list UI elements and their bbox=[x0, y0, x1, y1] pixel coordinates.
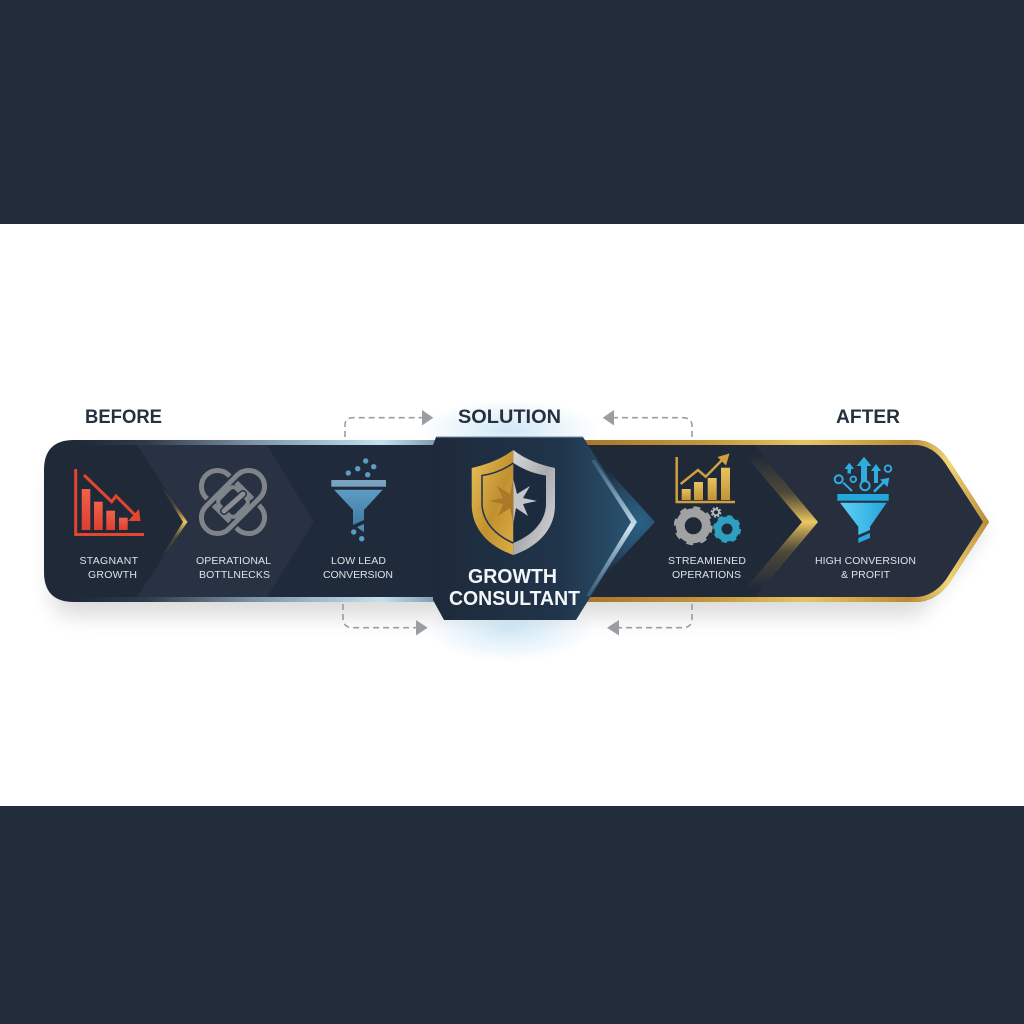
label: growth consultant bbox=[449, 566, 580, 610]
solution hexagon bbox=[433, 437, 637, 620]
before band top edge bbox=[74, 440, 436, 445]
panel: low lead conversion bbox=[267, 445, 440, 597]
label: low lead conversion: CONVERSION bbox=[323, 569, 393, 581]
panel: high conversion bbox=[755, 445, 983, 597]
icon: leaky funnel bbox=[331, 458, 386, 541]
label: growth consultant: CONSULTANT bbox=[449, 588, 580, 610]
panel: stagnant growth base bbox=[44, 440, 989, 602]
label: operational bottlenecks: OPERATIONAL bbox=[196, 555, 271, 567]
blue glow behind solution panel bbox=[420, 400, 600, 662]
process band bbox=[44, 440, 989, 602]
top navy band bbox=[0, 0, 1024, 224]
gold chevron divider one bbox=[158, 482, 188, 562]
panel: operational bottlenecks bbox=[137, 445, 314, 597]
label: streamlined operations: OPERATIONS bbox=[672, 569, 741, 581]
label: streamlined operations bbox=[668, 555, 746, 581]
label: high conversion and profit bbox=[815, 555, 916, 581]
label: stagnant growth bbox=[80, 555, 139, 581]
label: growth consultant: GROWTH bbox=[468, 566, 557, 588]
icon: high conversion funnel bbox=[835, 457, 891, 543]
band drop shadow bbox=[52, 456, 985, 616]
hexagon top highlight bbox=[436, 436, 583, 438]
arrow: top left dashed bbox=[345, 410, 433, 437]
label: low lead conversion: LOW LEAD bbox=[331, 555, 386, 567]
heading: solution: SOLUTION bbox=[458, 407, 561, 428]
label: stagnant growth: STAGNANT bbox=[80, 555, 139, 567]
label: low lead conversion bbox=[323, 555, 393, 581]
icon: tangled knot bbox=[195, 464, 271, 540]
bottom navy band bbox=[0, 806, 1024, 1024]
label: streamlined operations: STREAMIENED bbox=[668, 555, 746, 567]
gold chevron divider two bbox=[738, 447, 818, 597]
after band gold border bbox=[570, 442, 986, 600]
before band bottom edge bbox=[74, 597, 436, 602]
arrow: top right dashed bbox=[603, 410, 692, 437]
arrow: bottom left dashed bbox=[343, 604, 428, 636]
label: operational bottlenecks bbox=[196, 555, 271, 581]
heading: after: AFTER bbox=[836, 407, 900, 428]
silver chevron bbox=[586, 460, 637, 596]
icon: shield bbox=[472, 450, 555, 555]
panel: solution bbox=[433, 437, 655, 620]
label: high conversion and profit: & PROFIT bbox=[841, 569, 891, 581]
label: high conversion and profit: HIGH CONVERSION bbox=[815, 555, 916, 567]
icon: declining bar chart bbox=[76, 469, 144, 534]
blue arrow tip bbox=[585, 445, 655, 597]
label: operational bottlenecks: BOTTLNECKS bbox=[199, 569, 270, 581]
heading: before: BEFORE bbox=[85, 407, 162, 428]
label: stagnant growth: GROWTH bbox=[88, 569, 137, 581]
icon: rising chart with gears bbox=[676, 454, 739, 543]
arrow: bottom right dashed bbox=[607, 604, 692, 636]
